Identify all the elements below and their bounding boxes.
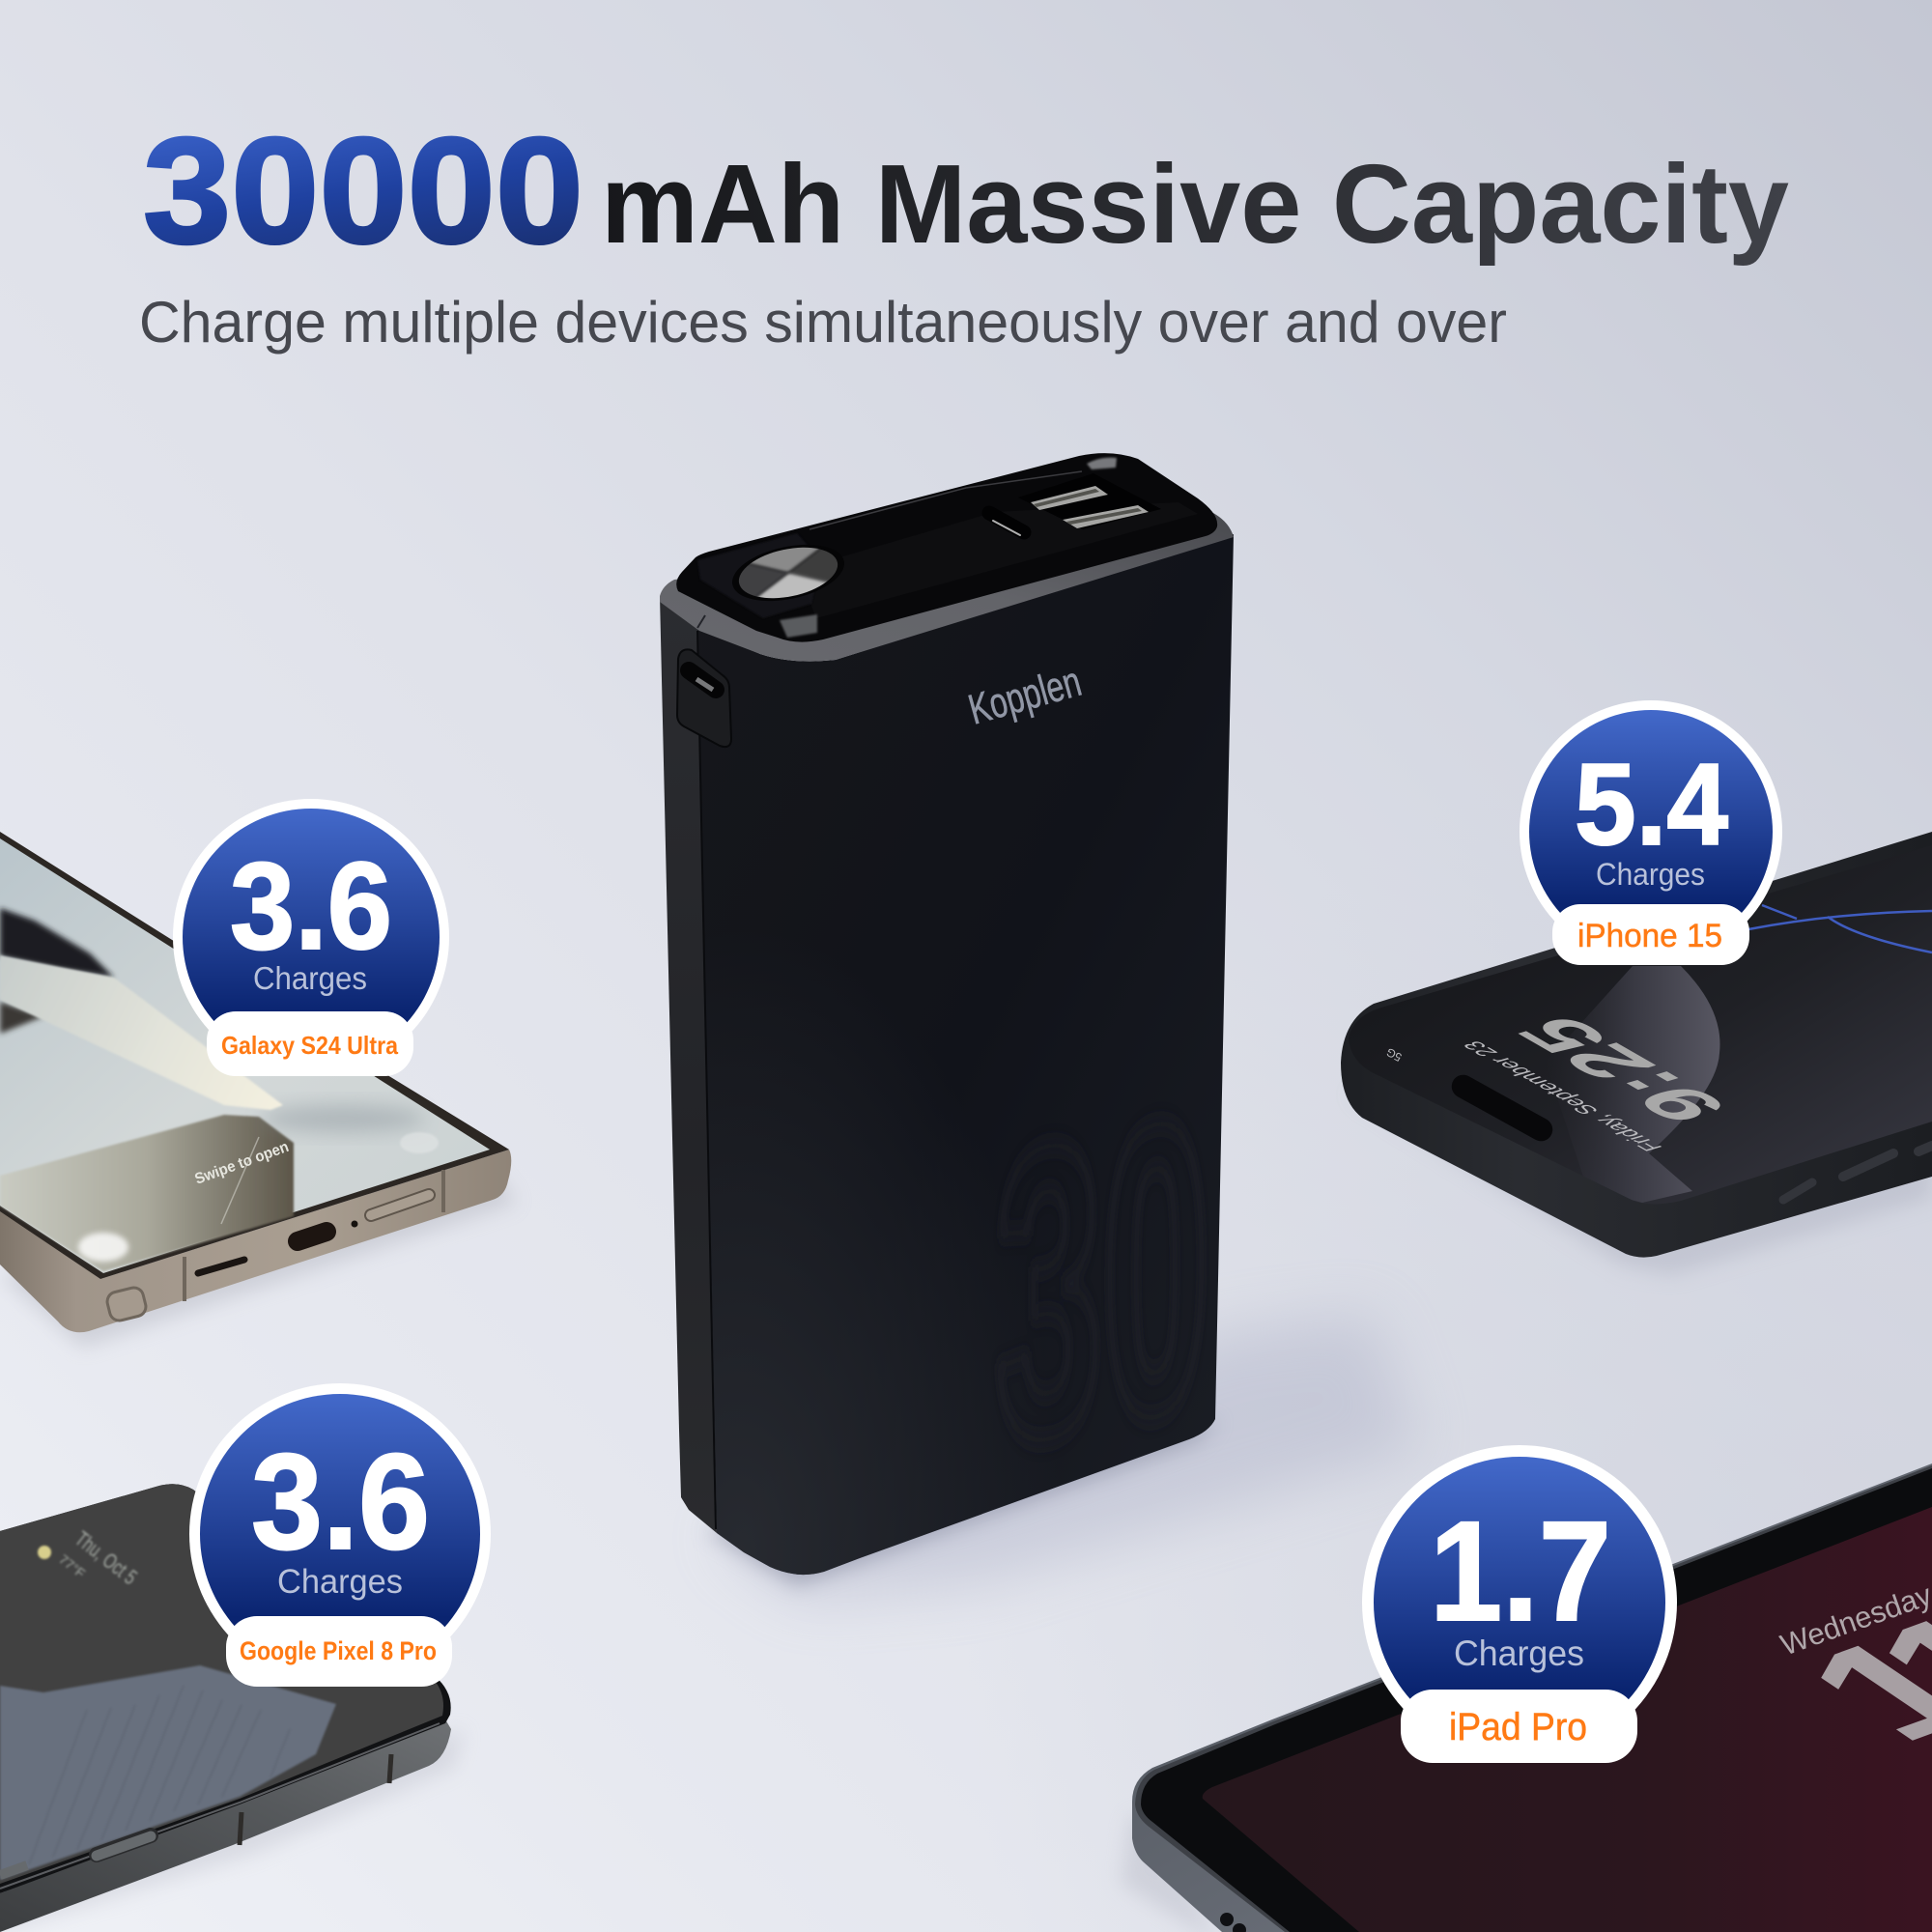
weather sun <box>38 1546 51 1559</box>
usb-a port 1 shade <box>1034 489 1099 507</box>
volume button <box>0 1865 27 1875</box>
band seam <box>697 615 705 628</box>
speaker <box>198 1260 244 1273</box>
device: Samsung Galaxy S24 Ultra <box>0 832 517 1348</box>
title number: 30000 <box>143 107 583 275</box>
speaker holes <box>1220 1913 1234 1926</box>
metal left wedge <box>725 546 794 611</box>
device: Google Pixel 8 Pro <box>0 1484 464 1932</box>
date: Thu, Oct 5 <box>71 1526 142 1589</box>
device: iPad Pro <box>1121 1463 1932 1932</box>
wallpaper highlight <box>221 1137 259 1224</box>
badge value: 5.4 <box>1575 740 1728 869</box>
volume button 1 <box>1783 1182 1812 1200</box>
top edge highlight <box>810 471 1082 529</box>
pixel antenna band 1 <box>240 1812 242 1845</box>
badge disc <box>1374 1457 1665 1748</box>
badge caption: Charges <box>253 960 367 996</box>
badge disc <box>183 809 440 1065</box>
top inner panel <box>797 502 1198 618</box>
left glossy patch <box>697 533 821 618</box>
pixel screen <box>0 1484 443 1884</box>
swipe text: Swipe to open <box>193 1139 291 1188</box>
corner reflection left <box>780 614 817 638</box>
power button inner <box>97 1836 151 1856</box>
pixel frame <box>0 1719 451 1932</box>
blue ellipse <box>1828 917 1932 952</box>
ipad bezel <box>1141 1468 1932 1932</box>
galaxy bezel <box>0 832 509 1279</box>
side panel <box>660 596 717 1533</box>
galaxy wallpaper wedge <box>0 1115 294 1271</box>
volume button 2 <box>1843 1153 1893 1177</box>
pixel glass <box>0 1484 451 1893</box>
dynamic island <box>1447 1070 1557 1146</box>
pen shadow on screen <box>261 1105 425 1132</box>
usb-a port 1 <box>1031 486 1108 510</box>
metal bottom wedge <box>731 561 851 611</box>
badge caption: Charges <box>1454 1634 1584 1673</box>
usb-c top port <box>989 513 1024 532</box>
badge device name: Google Pixel 8 Pro <box>240 1636 437 1665</box>
badge pill <box>226 1616 452 1687</box>
ipad metal edge <box>1132 1463 1932 1932</box>
usb-a port 2 shade <box>1066 508 1142 525</box>
badge pill <box>1552 904 1749 965</box>
temperature: 77°F <box>56 1551 88 1581</box>
divider right <box>441 1170 445 1212</box>
badge disc <box>1529 710 1773 953</box>
badge value: 1.7 <box>1430 1492 1611 1651</box>
power bank shadow <box>715 1314 1420 1599</box>
badge device name: Galaxy S24 Ultra <box>221 1031 398 1060</box>
device: iPhone 15 <box>1341 832 1932 1275</box>
embossed 30: 30 <box>995 1029 1209 1534</box>
pixel antenna band 2 <box>389 1754 391 1783</box>
metal right wedge <box>782 534 851 600</box>
badge pill <box>207 1011 413 1076</box>
wallpaper bubble <box>1546 966 1719 1203</box>
front face lower glow <box>697 534 1234 1575</box>
sim tray inner <box>371 1195 429 1215</box>
galaxy titanium frame <box>0 1150 511 1332</box>
camera shortcut <box>400 1132 439 1153</box>
metal top wedge <box>725 534 845 584</box>
date: Friday, September 23 <box>1458 1038 1669 1153</box>
side button <box>1918 1146 1932 1151</box>
ipad shadow <box>1121 1816 1217 1932</box>
badge ring <box>1520 700 1782 963</box>
stylus dark reflection <box>0 908 114 978</box>
usb-c top highlight <box>993 521 1020 535</box>
usb-a port 2 <box>1063 505 1149 528</box>
blue line lower <box>1748 911 1932 929</box>
mic hole <box>352 1221 357 1227</box>
badge: Google Pixel 8 Pro <box>189 1383 491 1687</box>
brand logo: Kopplen <box>964 658 1086 734</box>
usb-c port <box>298 1232 327 1241</box>
stylus lower reflection <box>0 1002 43 1034</box>
iphone frame <box>1341 832 1932 1258</box>
badge ring <box>173 799 449 1075</box>
s-pen button <box>105 1286 148 1322</box>
pixel wallpaper mountain <box>0 1665 336 1880</box>
front face <box>697 534 1234 1575</box>
pixel shadow <box>0 1729 464 1932</box>
iphone wallpaper <box>1384 905 1932 1203</box>
usb-a recess <box>1018 473 1161 529</box>
divider left <box>183 1257 186 1301</box>
contact shadow <box>705 1420 1219 1586</box>
screen glow <box>78 1233 128 1262</box>
seam <box>697 631 716 1529</box>
pixel glass highlight <box>0 1723 440 1889</box>
power button metal <box>725 534 851 611</box>
power button ring <box>727 535 849 611</box>
iphone screen <box>1349 845 1932 1204</box>
badge device name: iPhone 15 <box>1577 918 1722 954</box>
micro usb port <box>689 670 716 690</box>
status bar: 5G <box>1384 1045 1404 1065</box>
badge pill <box>1401 1690 1637 1763</box>
stylus <box>0 955 283 1110</box>
badge ring <box>1362 1445 1677 1760</box>
badge: Galaxy S24 Ultra <box>173 799 449 1076</box>
time: 9:25 <box>1496 1009 1749 1129</box>
power bank <box>660 453 1420 1599</box>
micro usb cover <box>677 649 731 747</box>
title text: mAh Massive Capacity <box>601 141 1789 267</box>
badge device name: iPad Pro <box>1449 1706 1587 1748</box>
title <box>143 107 1789 275</box>
speaker hole 2 <box>1233 1923 1246 1932</box>
iphone shadow <box>1348 1092 1932 1275</box>
badge value: 3.6 <box>230 838 392 976</box>
top glossy cap <box>676 453 1217 642</box>
ipad screen <box>1198 1497 1932 1932</box>
badge ring <box>189 1383 491 1685</box>
badge: iPhone 15 <box>1520 700 1782 965</box>
badge value: 3.6 <box>251 1425 430 1577</box>
galaxy shadow <box>7 1185 512 1349</box>
wallpaper texture <box>29 1686 290 1864</box>
badge caption: Charges <box>277 1563 403 1601</box>
sim tray <box>371 1195 429 1215</box>
grey band <box>660 510 1234 662</box>
blue line upper <box>1762 905 1797 919</box>
badge caption: Charges <box>1596 857 1705 892</box>
subtitle: Charge multiple devices simultaneously over and over <box>139 290 1507 355</box>
micro usb metal <box>696 679 713 690</box>
corner reflection right <box>1087 458 1117 469</box>
badge: iPad Pro <box>1362 1445 1677 1763</box>
power button <box>97 1835 151 1855</box>
galaxy screen <box>0 838 490 1273</box>
ipad rim <box>1135 1465 1932 1932</box>
badge disc <box>200 1394 480 1674</box>
